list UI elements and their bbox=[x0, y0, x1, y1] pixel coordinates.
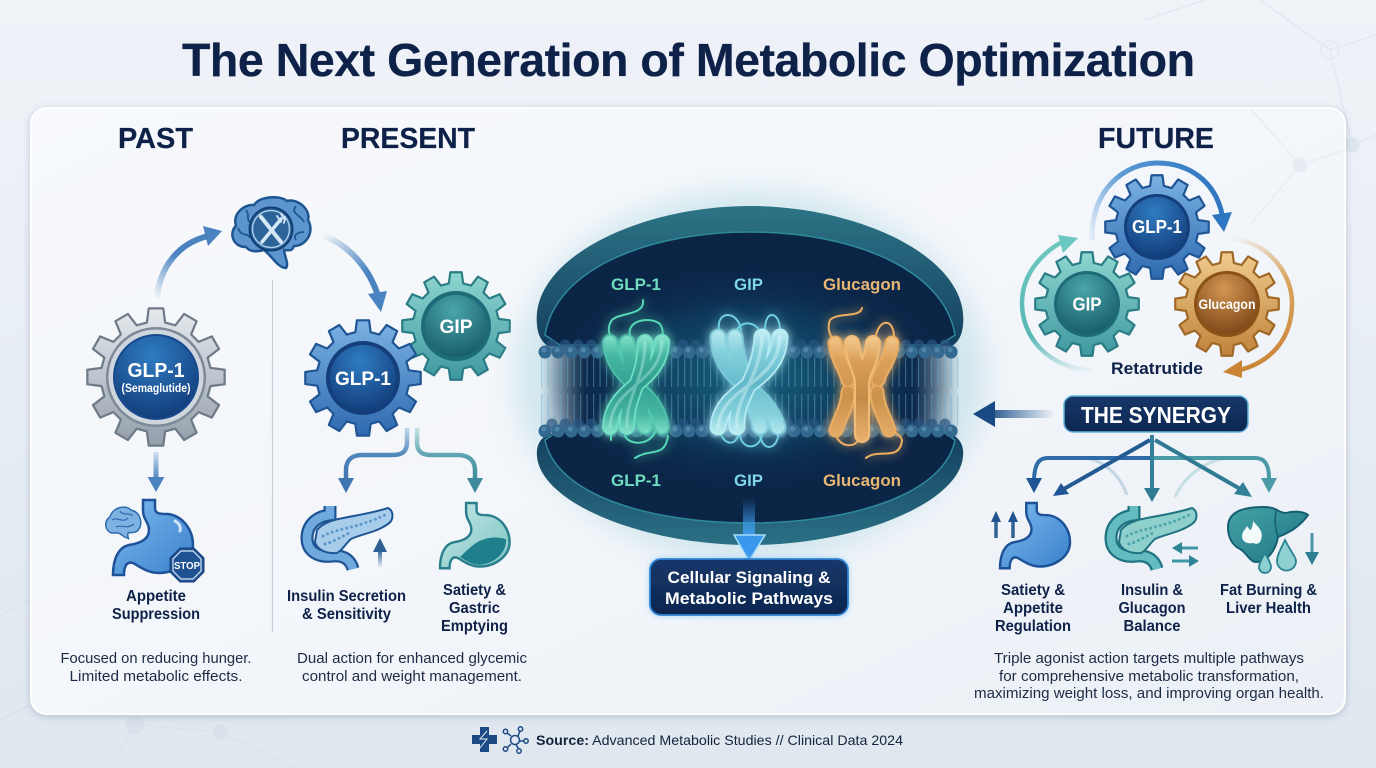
divider line bbox=[272, 280, 274, 632]
gear: future GLP-1 bbox=[1105, 175, 1209, 279]
panel: past bbox=[60, 123, 252, 685]
icon: brain with crossed fork and knife bbox=[232, 197, 310, 268]
receptor labels, bottom: Glucagon bbox=[823, 471, 901, 490]
gear: GLP-1 bbox=[305, 320, 421, 436]
callout: cellular signaling bbox=[650, 559, 848, 615]
gear: future GIP: GIP bbox=[1072, 294, 1102, 314]
gear: GIP bbox=[402, 272, 510, 380]
icon: stomach with up arrows bbox=[991, 503, 1070, 568]
description: future: Triple agonist action targets multiple pathways bbox=[994, 650, 1304, 667]
footer: source bbox=[472, 727, 903, 753]
gear: GLP-1 semaglutide: GLP-1 bbox=[128, 360, 184, 382]
icon: stomach with brain and stop sign bbox=[106, 500, 204, 582]
description: present: Dual action for enhanced glycemic bbox=[297, 650, 527, 667]
label: retatrutide: Retatrutide bbox=[1111, 360, 1203, 378]
description: past: Focused on reducing hunger. bbox=[60, 650, 252, 667]
label: satiety and appetite regulation bbox=[995, 582, 1071, 635]
label: insulin and glucagon balance bbox=[1118, 582, 1186, 635]
icon: pancreas bbox=[307, 506, 392, 569]
heading: present: PRESENT bbox=[341, 123, 475, 155]
label: satiety and appetite regulation: Regulation bbox=[995, 618, 1071, 635]
panel: present bbox=[287, 123, 527, 685]
receptor labels, bottom bbox=[611, 471, 901, 490]
label: insulin and glucagon balance: Balance bbox=[1124, 618, 1181, 635]
callout: cellular signaling: Cellular Signaling & bbox=[668, 568, 830, 587]
panel: cell membrane with receptors bbox=[515, 190, 985, 615]
icon: liver with flame and droplets bbox=[1228, 507, 1319, 573]
gear: future GIP bbox=[1035, 252, 1139, 356]
receptor: GIP bbox=[718, 315, 780, 447]
receptor labels, bottom: GIP bbox=[734, 471, 763, 490]
label: satiety and appetite regulation: Appetite bbox=[1003, 600, 1063, 617]
receptor labels, top bbox=[611, 275, 901, 294]
description: past bbox=[60, 650, 252, 685]
arrow: gear to brain bbox=[157, 226, 222, 298]
heading: past: PAST bbox=[118, 123, 193, 155]
label: appetite suppression: Suppression bbox=[112, 606, 200, 623]
receptor labels, top: GLP-1 bbox=[611, 275, 661, 294]
main card bbox=[31, 108, 1345, 714]
label: insulin secretion: & Sensitivity bbox=[302, 606, 391, 623]
arrow: synergy to membrane bbox=[973, 401, 1055, 427]
capsule body bbox=[537, 206, 963, 545]
callout: the synergy bbox=[1064, 396, 1248, 432]
icon: pancreas with exchange arrows bbox=[1111, 506, 1199, 569]
arrow: insulin up bbox=[373, 538, 387, 568]
arrow: membrane to signaling bbox=[734, 498, 765, 561]
label: appetite suppression: Appetite bbox=[126, 588, 186, 605]
label: satiety and gastric emptying: Emptying bbox=[441, 618, 508, 635]
gear: GIP: GIP bbox=[440, 317, 473, 338]
description: past: Limited metabolic effects. bbox=[70, 668, 242, 685]
arrow: gear to stomach bbox=[148, 452, 164, 492]
receptor labels, top: GIP bbox=[734, 275, 763, 294]
label: satiety and gastric emptying: Satiety & bbox=[443, 582, 506, 599]
label: insulin secretion: Insulin Secretion bbox=[287, 588, 406, 605]
description: future: for comprehensive metabolic transformation, bbox=[999, 668, 1299, 685]
outer halo bbox=[515, 190, 985, 560]
description: future bbox=[974, 650, 1324, 702]
callout: the synergy: THE SYNERGY bbox=[1081, 402, 1231, 428]
heading: future: FUTURE bbox=[1098, 123, 1214, 155]
description: present bbox=[297, 650, 527, 685]
gear: GLP-1 semaglutide: (Semaglutide) bbox=[122, 383, 191, 395]
icon: molecule network bbox=[503, 727, 528, 753]
icon: small brain bbox=[106, 507, 141, 539]
receptor: GLP-1 bbox=[609, 300, 668, 458]
receptor: Glucagon bbox=[829, 308, 902, 458]
label: insulin and glucagon balance: Glucagon bbox=[1118, 600, 1186, 617]
gear: future Glucagon: Glucagon bbox=[1198, 296, 1256, 312]
label: insulin and glucagon balance: Insulin & bbox=[1121, 582, 1183, 599]
icon: stop sign: STOP bbox=[174, 560, 200, 572]
gear: GLP-1: GLP-1 bbox=[335, 369, 391, 390]
gear: future GLP-1: GLP-1 bbox=[1132, 217, 1182, 237]
description: future: maximizing weight loss, and improving organ health. bbox=[974, 685, 1324, 702]
label: appetite suppression bbox=[112, 588, 200, 623]
gear: future Glucagon bbox=[1175, 252, 1279, 356]
receptor labels, bottom: GLP-1 bbox=[611, 471, 661, 490]
label: satiety and gastric emptying: Gastric bbox=[449, 600, 500, 617]
branching arrows bbox=[338, 428, 483, 493]
gear: GLP-1 semaglutide bbox=[87, 308, 225, 446]
panel: future bbox=[973, 123, 1324, 702]
label: satiety and gastric emptying bbox=[441, 582, 508, 635]
receptor labels, top: Glucagon bbox=[823, 275, 901, 294]
callout: cellular signaling: Metabolic Pathways bbox=[665, 589, 833, 608]
title: The Next Generation of Metabolic Optimization bbox=[182, 34, 1195, 86]
source text: Source: Advanced Metabolic Studies // Clinical Data 2024 bbox=[536, 732, 903, 748]
icon: stomach with contents bbox=[440, 503, 510, 568]
label: fat burning and liver health: Fat Burning & bbox=[1220, 582, 1317, 599]
arc arrows bbox=[1022, 163, 1292, 378]
icon: medical cross bbox=[472, 727, 497, 752]
description: present: control and weight management. bbox=[302, 668, 522, 685]
branching arrows bbox=[1026, 435, 1277, 502]
label: fat burning and liver health: Liver Health bbox=[1226, 600, 1311, 617]
arrow: brain to gears bbox=[322, 235, 387, 312]
label: fat burning and liver health bbox=[1220, 582, 1317, 617]
lipid bilayer bbox=[541, 345, 960, 431]
label: insulin secretion bbox=[287, 588, 406, 623]
label: satiety and appetite regulation: Satiety & bbox=[1001, 582, 1065, 599]
